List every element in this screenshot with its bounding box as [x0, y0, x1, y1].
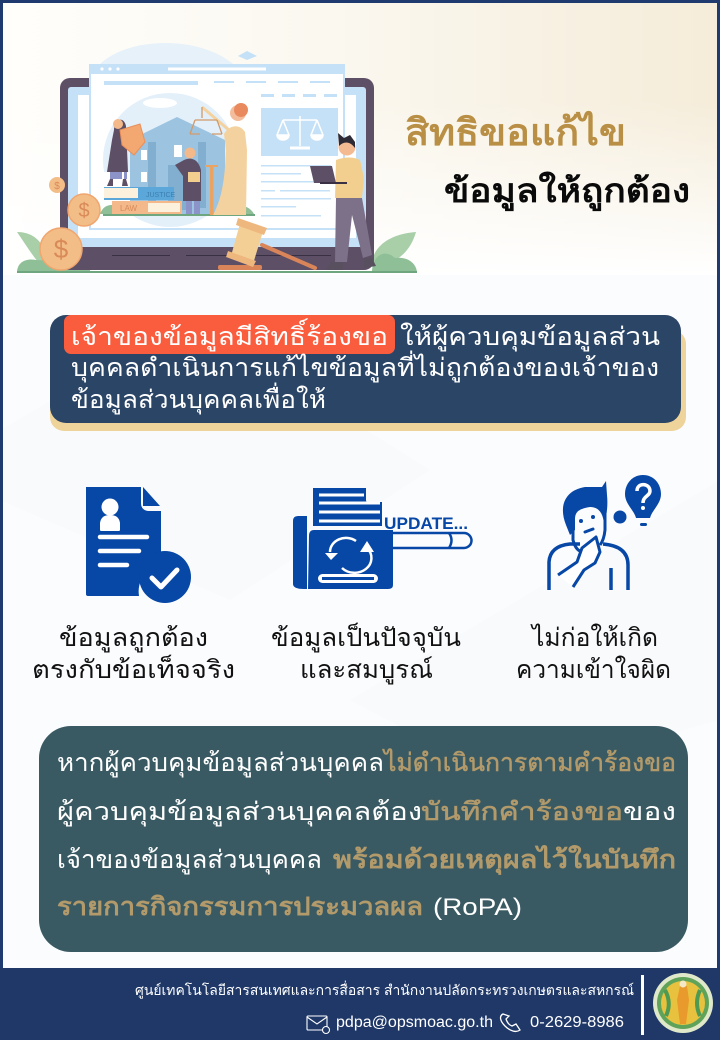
illustration: laptop and law scene: LAW — [120, 204, 137, 213]
illustration: laptop and law scene — [17, 43, 417, 273]
panel: controller obligation: พร้อมด้วยเหตุผลไว้ในบันทึก — [333, 844, 676, 876]
panel: data subject right: บุคคลดำเนินการแก้ไขข้อมูลที่ไม่ถูกต้องของเจ้าของ — [71, 350, 659, 383]
label: no misunderstanding: ความเข้าใจผิด — [516, 655, 671, 684]
logo — [653, 973, 713, 1033]
lawyer with shield — [107, 120, 128, 172]
panel: data subject right: ข้อมูลส่วนบุคคลเพื่อให้ — [71, 382, 326, 415]
footer — [0, 968, 720, 1040]
label: accurate data: ข้อมูลถูกต้อง — [59, 624, 208, 653]
label: up to date data: ข้อมูลเป็นปัจจุบัน — [271, 622, 461, 653]
man with laptop — [310, 133, 376, 270]
panel text line 2: ผู้ควบคุมข้อมูลส่วนบุคคลต้อง — [57, 798, 422, 827]
judge figure — [175, 159, 201, 201]
panel text line 1: หากผู้ควบคุมข้อมูลส่วนบุคคล — [57, 749, 384, 778]
icon: mail — [307, 1016, 330, 1034]
browser window — [90, 65, 344, 229]
panel text: เจ้าของข้อมูลมีสิทธิ์ร้องขอ — [71, 318, 388, 352]
panel: controller obligation: ไม่ดำเนินการตามคำร้องขอ — [382, 748, 676, 777]
header gradient band — [3, 3, 717, 275]
label: accurate data: ตรงกับข้อเท็จจริง — [32, 654, 235, 684]
label: no misunderstanding — [516, 623, 671, 684]
gavel — [262, 245, 315, 268]
panel: controller obligation: บันทึกคำร้องขอ — [421, 798, 623, 826]
title line 2: ข้อมูลให้ถูกต้อง — [444, 171, 690, 212]
panel: controller obligation: ของ — [623, 798, 676, 826]
panel: controller obligation — [39, 726, 688, 952]
title line 1: สิทธิขอแก้ไข — [405, 110, 626, 153]
ground and leaves — [17, 232, 417, 273]
background dome — [100, 43, 233, 64]
icon: document with check — [86, 487, 191, 603]
icon: confused person with idea — [549, 475, 661, 590]
footer phone: 0-2629-8986 — [530, 1014, 624, 1031]
footer email: pdpa@opsmoac.go.th — [336, 1014, 493, 1031]
laptop body — [60, 78, 374, 270]
label: up to date data — [271, 622, 461, 685]
label: accurate data — [32, 624, 235, 684]
coins — [49, 177, 65, 193]
label: no misunderstanding: ไม่ก่อให้เกิด — [530, 623, 658, 652]
books — [104, 187, 174, 200]
panel: data subject right: ให้ผู้ควบคุมข้อมูลส่วน — [400, 322, 660, 352]
panel: controller obligation: (RoPA) — [433, 894, 522, 921]
icon: update folder: UPDATE... — [384, 514, 468, 533]
illustration: laptop and law scene: $ — [54, 181, 60, 192]
label: up to date data: และสมบูรณ์ — [300, 656, 433, 685]
scales panel — [261, 108, 338, 156]
court scene circle — [103, 93, 237, 227]
illustration: laptop and law scene: $ — [54, 234, 69, 264]
icon: phone — [501, 1014, 520, 1031]
highlight label — [64, 315, 395, 354]
lady justice — [213, 126, 247, 215]
title — [405, 110, 690, 212]
panel text line 3: เจ้าของข้อมูลส่วนบุคคล — [57, 846, 322, 875]
illustration: laptop and law scene: JUSTICE — [146, 192, 176, 199]
icon: update folder — [293, 488, 472, 589]
illustration: laptop and law scene: $ — [78, 200, 90, 222]
footer organisation: ศูนย์เทคโนโลยีสารสนเทศและการสื่อสาร สำนักงานปลัดกระทรวงเกษตรและสหกรณ์ — [135, 981, 634, 999]
panel: data subject right — [50, 315, 686, 431]
panel text line 4: รายการกิจกรรมการประมวลผล — [57, 893, 423, 921]
